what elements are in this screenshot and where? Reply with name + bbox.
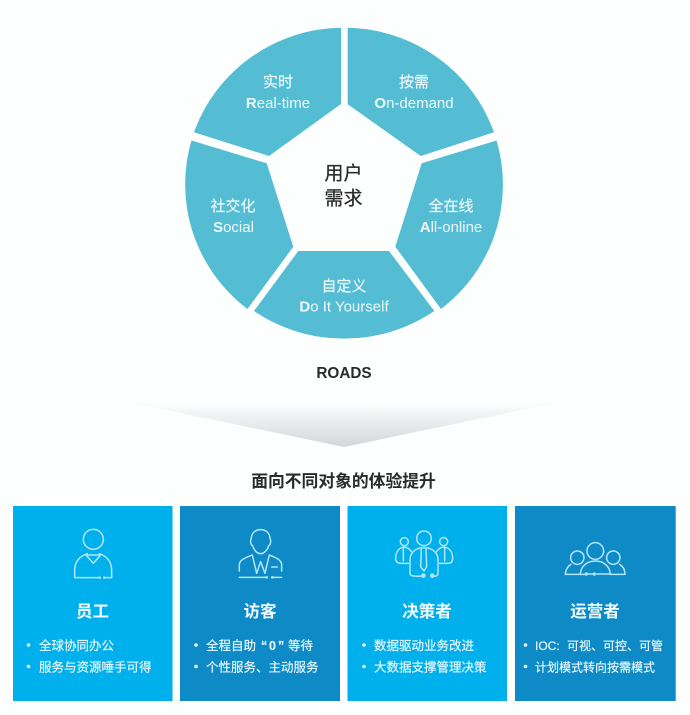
segment: do it yourself: 自定义	[321, 278, 367, 295]
bullet list: 全球协同办公	[39, 638, 115, 653]
label: ROADS: ROADS	[316, 365, 372, 382]
bullet list: 0	[269, 639, 276, 653]
icon: employee	[75, 529, 112, 579]
bullet list: “	[261, 639, 267, 653]
arrow: downward gradient chevron	[128, 402, 560, 447]
segment: do it yourself: Do It Yourself	[299, 298, 389, 316]
segment: on-demand: 按需	[399, 74, 429, 91]
title: 访客	[244, 601, 277, 621]
center label: 用户	[324, 162, 363, 184]
bullet list	[362, 638, 487, 674]
segment: social: Social	[213, 219, 254, 236]
bullet list: 全程自助	[206, 639, 256, 653]
title: 决策者	[402, 601, 452, 621]
icon: operators	[565, 543, 625, 576]
bullet list: 等待	[288, 638, 314, 653]
segment: all-online	[395, 140, 503, 309]
segment: real-time: 实时	[263, 74, 293, 91]
panel: decision makers	[348, 506, 507, 701]
icon: visitor	[239, 530, 282, 579]
bullet list	[194, 638, 319, 674]
pentagon wheel diagram	[185, 28, 503, 339]
segment: social	[185, 140, 293, 309]
title: 运营者	[570, 602, 620, 621]
bullet list: 数据驱动业务改进	[374, 638, 475, 653]
panel: employee	[13, 506, 172, 701]
panel: visitor	[180, 506, 340, 701]
segment: real-time	[194, 28, 341, 156]
section heading: 面向不同对象的体验提升	[251, 471, 436, 491]
title: 员工	[76, 603, 109, 621]
bullet list	[524, 638, 663, 674]
segment: on-demand: On-demand	[374, 95, 454, 112]
segment: do it yourself	[254, 251, 434, 339]
segment: real-time: Real-time	[246, 95, 310, 112]
bullet list: 计划模式转向按需模式	[535, 660, 655, 674]
bullet list: 大数据支撑管理决策	[374, 660, 487, 674]
bullet list: 服务与资源唾手可得	[39, 660, 152, 674]
icon: decision makers	[396, 531, 453, 578]
bullet list: ”	[278, 639, 284, 653]
segment: social: 社交化	[210, 197, 256, 215]
center label: 需求	[324, 188, 363, 210]
segment: all-online: 全在线	[428, 197, 474, 215]
panel: operators	[515, 506, 676, 701]
bullet list	[27, 638, 152, 674]
segment: all-online: All-online	[420, 219, 482, 236]
bullet list: 可视、可控、可管	[567, 638, 663, 653]
center label	[324, 162, 363, 210]
segment: on-demand	[348, 28, 494, 156]
bullet list: 个性服务、主动服务	[206, 660, 319, 674]
bullet list: IOC:	[535, 639, 560, 653]
